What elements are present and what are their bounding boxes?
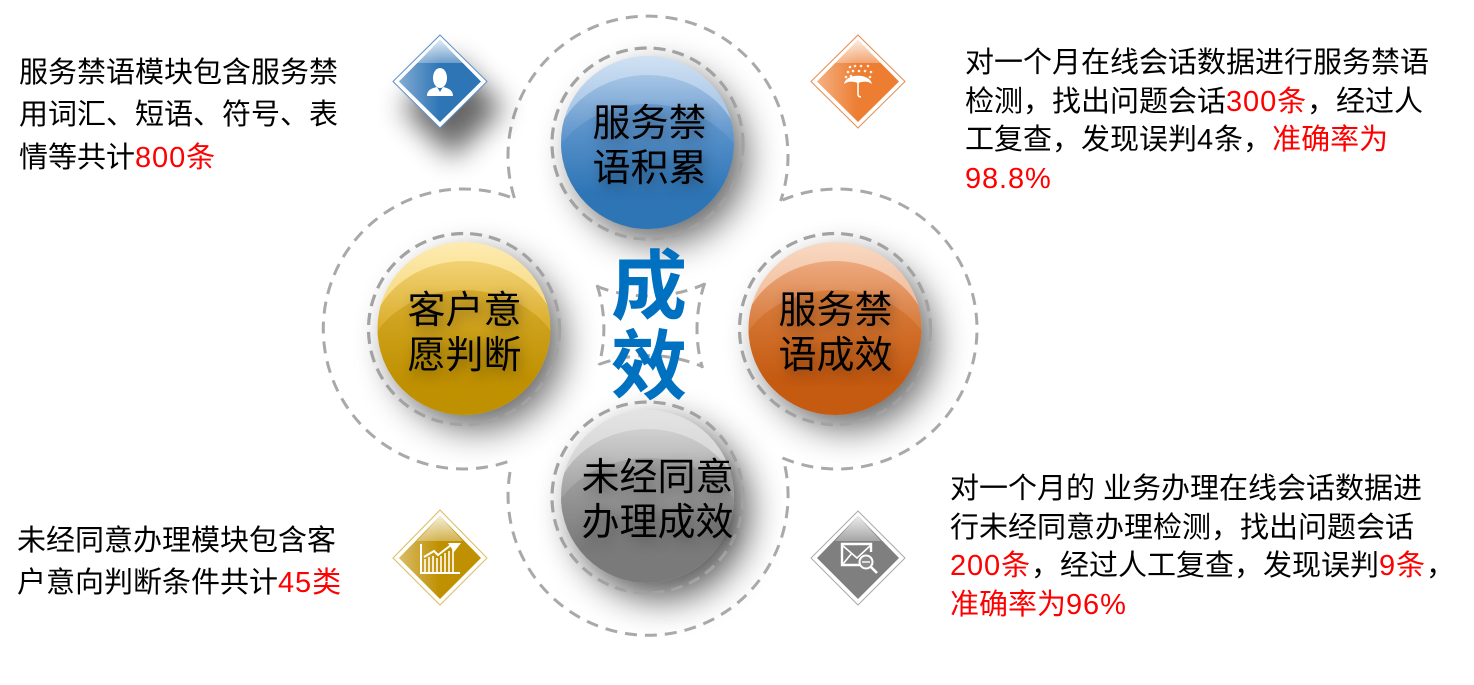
text block: bottom right: 行未经同意办理检测，找出问题会话 (950, 512, 1414, 544)
disc: gray (561, 410, 734, 583)
disc: yellow (378, 242, 550, 415)
icon: blue diamond with person (393, 35, 504, 158)
shadows behind discs (391, 71, 934, 599)
disc label: 未经同意办理成效: 未经同意 (581, 457, 734, 499)
dashed outer outline (323, 16, 977, 635)
disc label: 服务禁语积累: 服务禁 (592, 103, 706, 145)
center title: 成 (611, 245, 687, 330)
center title: 效 (611, 325, 687, 410)
text block: top right: 检测，找出问题会话300条，经过人 (965, 86, 1423, 118)
disc label: 服务禁语积累: 语积累 (592, 148, 706, 190)
disc label: 服务禁语积累 (592, 103, 711, 192)
disc label: 服务禁语成效: 服务禁 (778, 290, 892, 332)
text block: top right (965, 47, 1429, 195)
dashed inner rings (368, 48, 930, 593)
text block: top left (19, 56, 338, 174)
text block: top left: 情等共计800条 (19, 142, 216, 174)
text block: bottom right: 200条，经过人工复查，发现误判9条， (950, 550, 1455, 582)
text block: bottom left: 未经同意办理模块包含客 (17, 525, 336, 557)
text block: top left: 用词汇、短语、符号、表 (19, 99, 338, 131)
text block: bottom right: 对一个月的 业务办理在线会话数据进 (950, 473, 1422, 505)
disc label: 服务禁语成效 (778, 290, 897, 380)
icon: gray diamond with envelope (811, 511, 905, 605)
disc label: 客户意愿判断 (407, 290, 525, 380)
text block: bottom right (950, 473, 1455, 621)
disc label: 未经同意办理成效: 办理成效 (581, 502, 734, 544)
text block: bottom left: 户意向判断条件共计45类 (17, 567, 342, 599)
disc label: 服务禁语成效: 语成效 (778, 335, 892, 377)
disc: orange (748, 242, 922, 415)
disc: blue (561, 56, 734, 229)
text block: bottom left (17, 525, 342, 599)
disc label: 客户意愿判断: 客户意 (407, 290, 522, 332)
text block: top right: 工复查，发现误判4条，准确率为 (965, 124, 1388, 156)
icon: orange diamond with umbrella (811, 35, 905, 128)
text block: top right: 对一个月在线会话数据进行服务禁语 (965, 47, 1429, 79)
text block: bottom right: 准确率为96% (950, 589, 1127, 621)
diagram artwork (322, 14, 978, 637)
text block: top right: 98.8% (965, 163, 1052, 195)
icon: gold diamond with chart (393, 510, 487, 605)
disc label: 未经同意办理成效 (581, 457, 736, 546)
disc label: 客户意愿判断: 愿判断 (407, 335, 522, 377)
center title (611, 245, 687, 410)
text block: top left: 服务禁语模块包含服务禁 (19, 56, 338, 88)
